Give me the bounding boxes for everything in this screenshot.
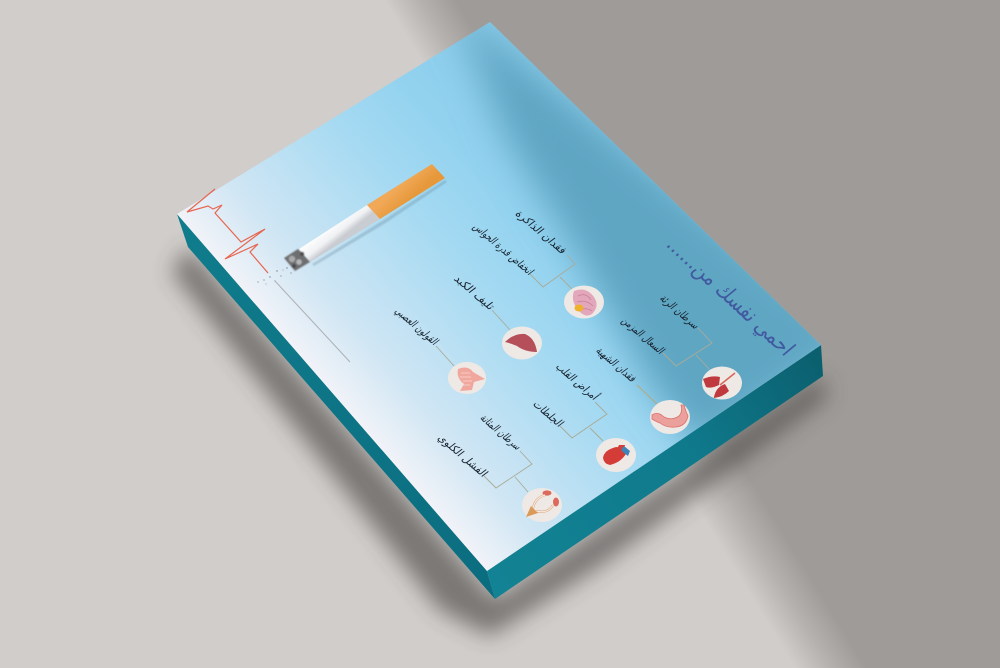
label: kidney failure: الفشل الكلوي: [435, 432, 491, 479]
card drop shadow: [172, 247, 826, 636]
title: احمي نفسك من......: [661, 233, 800, 361]
icon: urinary system: [522, 488, 562, 522]
connector: colon: [436, 346, 455, 367]
label: irritable bowel: القولون العصبي: [392, 306, 442, 347]
icon: heart: [596, 438, 636, 472]
heartbeat line: [187, 189, 268, 273]
card block: [177, 0, 860, 599]
group: bladder and kidney: [435, 413, 562, 522]
group: lungs: [619, 293, 742, 400]
ash particles: [257, 267, 292, 284]
bracket: lungs: [663, 328, 712, 369]
right side of block: [487, 345, 823, 599]
bracket: brain: [530, 255, 575, 289]
connector: stomach: [637, 385, 657, 404]
icon: intestine: [448, 362, 486, 394]
cigarette filter: [367, 164, 445, 219]
icon: brain: [564, 286, 604, 318]
icon: lungs: [702, 366, 742, 400]
label: chronic cough: السعال المزمن: [619, 315, 668, 356]
connector: liver: [492, 310, 510, 330]
bracket: kidney: [484, 451, 532, 492]
cigarette ash: [284, 249, 310, 271]
cigarette: [284, 164, 447, 271]
label: loss of appetite: فقدان الشهية: [593, 345, 640, 384]
label: reduced senses: انخفاض قدرة الحواس: [470, 221, 537, 277]
group: memory and senses / brain: [470, 208, 604, 318]
group: liver: [451, 273, 542, 360]
bracket: heart: [560, 402, 607, 441]
label: liver cirrhosis: تليف الكبد: [451, 273, 498, 312]
timeline line: [275, 281, 350, 362]
cigarette shadow: [312, 180, 447, 266]
cigarette paper: [299, 205, 380, 262]
group: colon: [392, 306, 486, 394]
label: heart disease: أمراض القلب: [553, 361, 603, 402]
label: memory loss: فقدان الذاكرة: [512, 208, 570, 256]
label: blood clots: الجلطات: [530, 399, 567, 429]
card front face: [177, 22, 821, 571]
label: lung cancer: سرطان الرئة: [657, 293, 703, 331]
group: stomach: [593, 345, 690, 434]
icon: stomach: [650, 400, 690, 434]
front face shading: [452, 22, 821, 444]
group: heart: [530, 361, 636, 472]
icon: liver: [502, 326, 542, 360]
label: bladder cancer: سرطان المثانة: [477, 413, 525, 452]
left side of block: [177, 214, 495, 599]
